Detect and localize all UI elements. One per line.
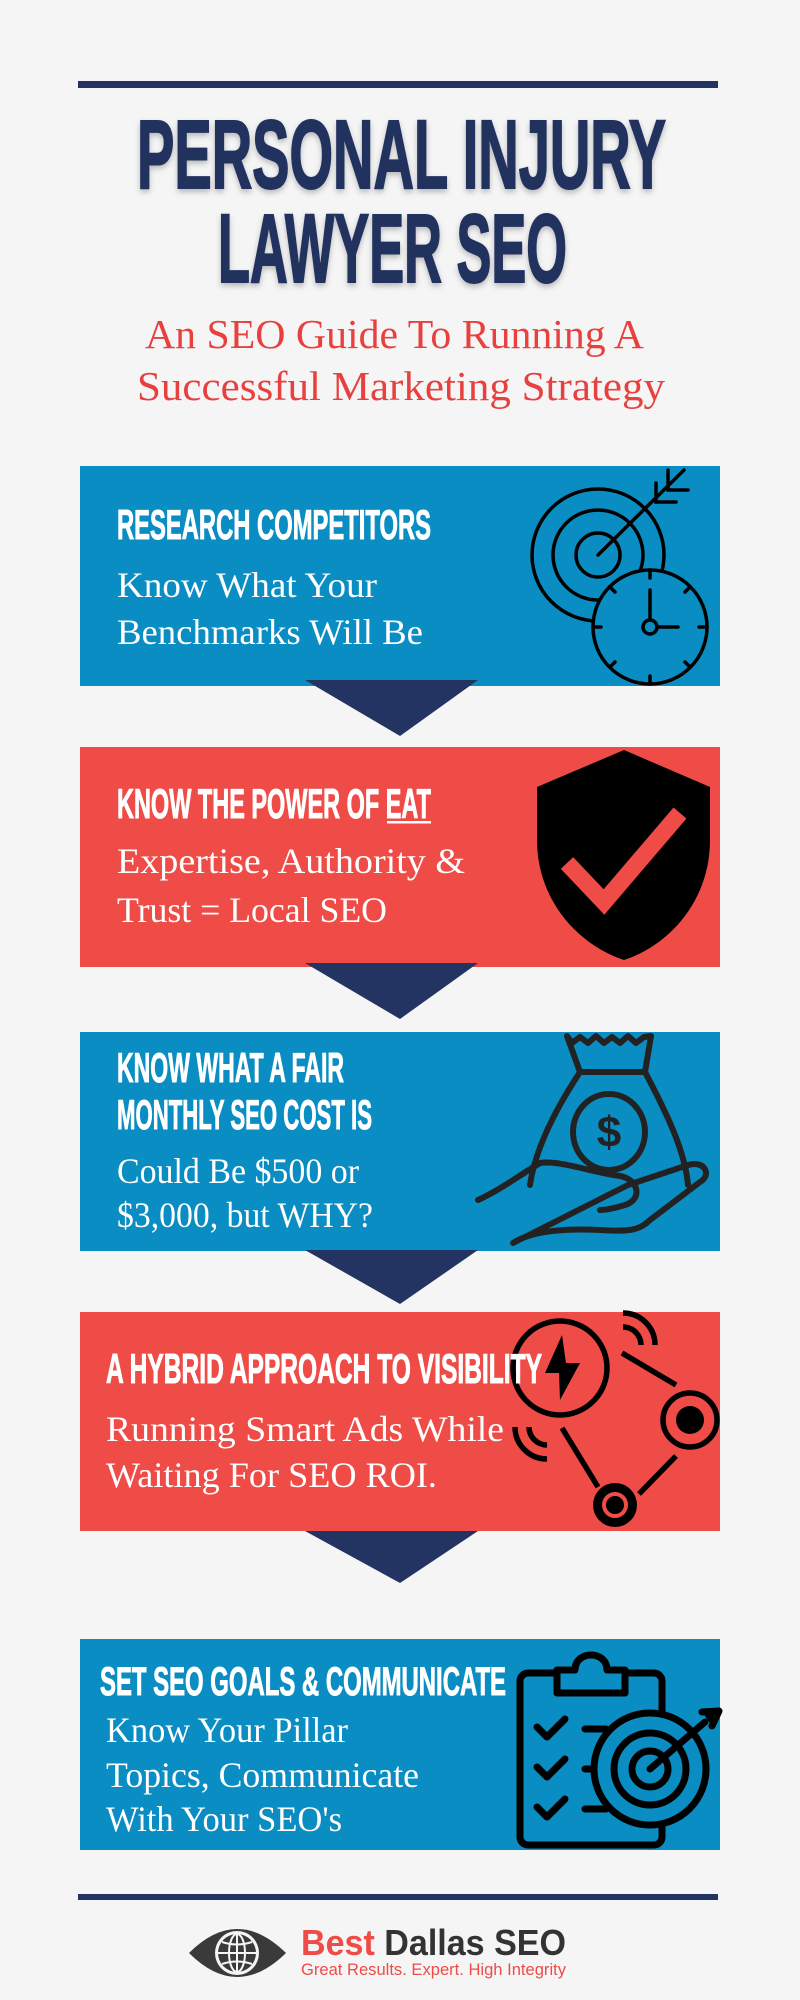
heading: set goals: SET SEO GOALS & COMMUNICATE: [100, 1660, 506, 1704]
panel: set SEO goals: [80, 1639, 720, 1850]
arrow: [305, 963, 478, 1019]
arrow: [305, 1250, 478, 1304]
panel: SEO cost: [80, 1032, 720, 1251]
subtitle: An SEO Guide To Running A: [145, 311, 644, 357]
text block: pillar topics: [106, 1710, 419, 1839]
icon: clipboard with target: [520, 1655, 719, 1845]
icon: money bag in hand: $: [597, 1108, 621, 1157]
logo: Best Dallas SEO: Great Results. Expert. High Integrity: [301, 1960, 566, 1979]
text block: pillar topics: Know Your Pillar: [106, 1710, 348, 1750]
text block: smart ads: Running Smart Ads While: [106, 1409, 504, 1449]
heading: fair monthly cost: KNOW WHAT A FAIR: [117, 1044, 344, 1091]
heading: fair monthly cost: MONTHLY SEO COST IS: [117, 1091, 372, 1138]
text block: benchmarks: Know What Your: [117, 565, 377, 605]
text block: pillar topics: Topics, Communicate: [106, 1755, 419, 1795]
text block: cost: Could Be $500 or: [117, 1151, 359, 1191]
heading: research competitors: RESEARCH COMPETITORS: [117, 501, 431, 548]
text block: pillar topics: With Your SEO's: [106, 1799, 342, 1839]
panel: research competitors: [80, 466, 720, 686]
subtitle: [137, 311, 666, 409]
heading: fair monthly cost: [117, 1044, 372, 1138]
subtitle: Successful Marketing Strategy: [137, 363, 666, 409]
text block: expertise: [117, 841, 465, 930]
text block: benchmarks: [117, 565, 423, 652]
text block: cost: $3,000, but WHY?: [117, 1195, 373, 1235]
icon: target and clock: [532, 470, 707, 684]
text block: expertise: Expertise, Authority &: [117, 841, 465, 881]
icon: money bag in hand: [478, 1036, 706, 1243]
arrow: [305, 680, 478, 736]
heading: power of EAT: KNOW THE POWER OF EAT: [117, 780, 431, 827]
arrow: [305, 1531, 478, 1583]
icon: network with lightning: [513, 1313, 717, 1527]
text block: cost: [117, 1151, 373, 1235]
text block: benchmarks: Benchmarks Will Be: [117, 612, 423, 652]
icon: shield check: [537, 750, 710, 960]
icon: eye globe: [189, 1929, 286, 1977]
title: [137, 100, 666, 303]
logo: Best Dallas SEO: [189, 1922, 566, 1979]
text block: smart ads: Waiting For SEO ROI.: [106, 1455, 437, 1495]
text block: smart ads: [106, 1409, 504, 1495]
panel: hybrid approach: [80, 1312, 720, 1531]
panel: EAT: [80, 747, 720, 967]
logo: Best Dallas SEO: Best Dallas SEO: [301, 1922, 566, 1963]
text block: expertise: Trust = Local SEO: [117, 890, 387, 930]
